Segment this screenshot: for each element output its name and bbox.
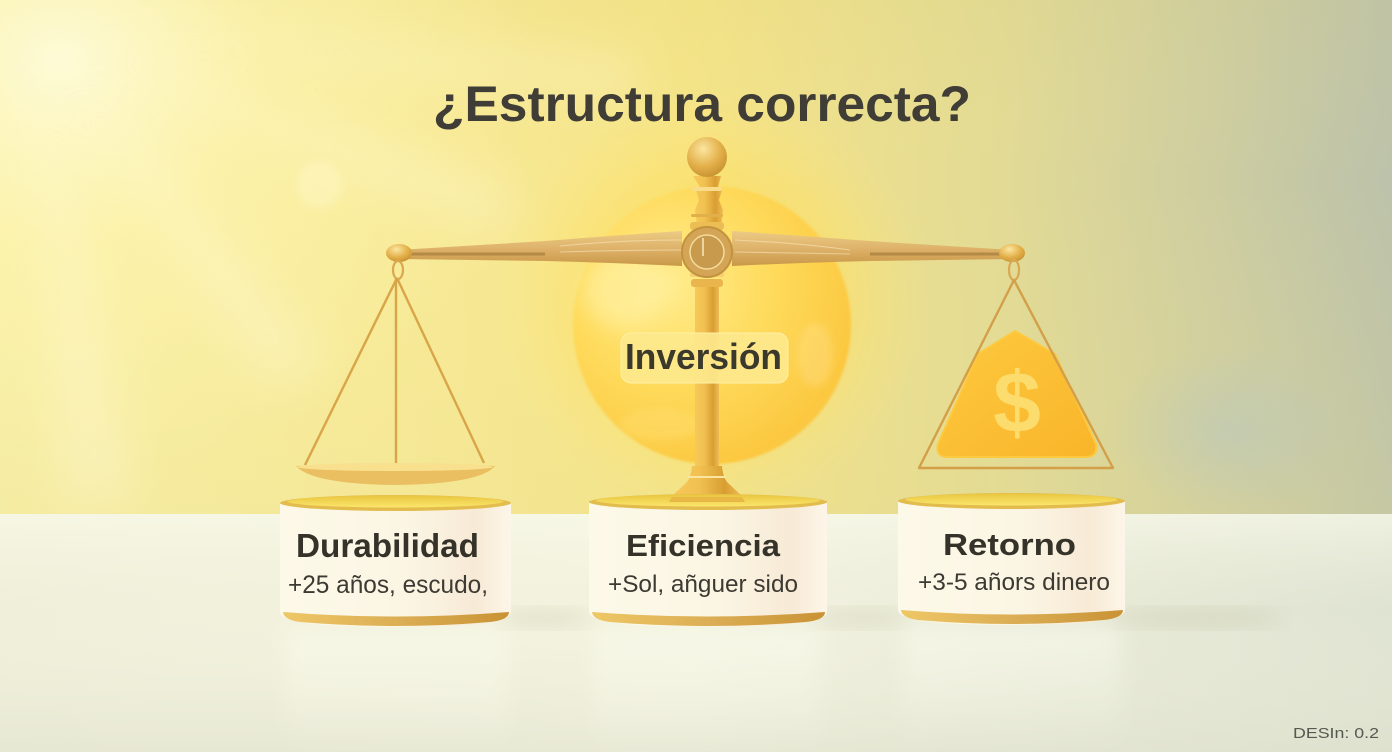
cylinder shadows [495,611,1285,625]
bokeh light spot [296,162,342,208]
beam hub [682,227,732,277]
scale beam [398,231,1012,266]
golden sphere [573,186,851,464]
pedestal: Durabilidad: +25 años, escudo, [288,571,488,599]
pedestal: Durabilidad [280,495,511,627]
sphere glow [497,85,927,515]
pedestal: Retorno [898,493,1125,625]
pedestal: Retorno: Retorno [943,527,1076,562]
left scale pan with chains [296,244,495,485]
title: ¿Estructura correcta? [433,76,971,132]
sun rays [40,30,640,510]
scale finial [687,137,727,287]
background wall [0,0,1392,516]
scale pole [672,285,742,503]
pedestal: Eficiencia [589,494,827,627]
table surface [0,514,1392,752]
price tag [937,331,1096,457]
pedestal: Retorno: +3-5 añors dinero [918,569,1110,596]
pedestal: Eficiencia: +Sol, añguer sido [608,571,798,598]
label: Inversión: Inversión [625,336,782,377]
pedestal: Durabilidad: Durabilidad [296,527,479,564]
version footnote: DESIn: 0.2 [1293,725,1379,742]
price tag: $ [993,355,1041,451]
right scale pan with price tag [919,244,1113,468]
pedestal: Eficiencia: Eficiencia [626,528,781,563]
